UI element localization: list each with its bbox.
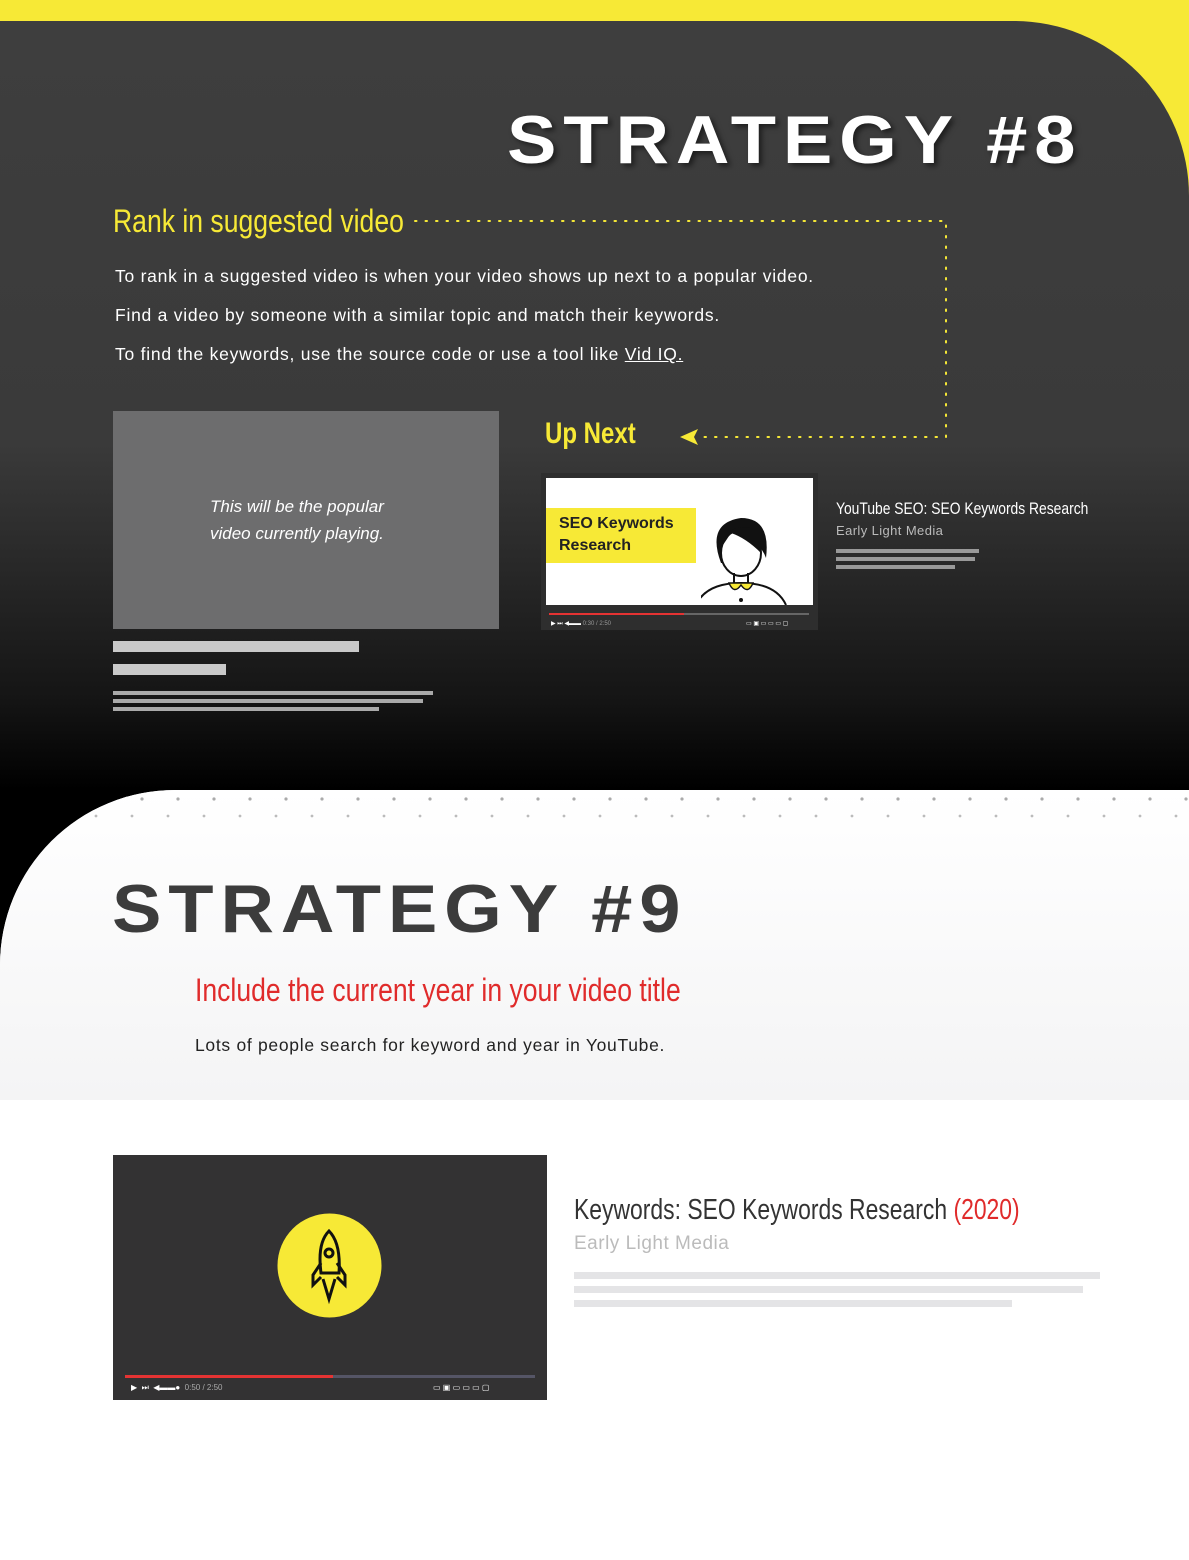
panel: strategy 9 light section	[0, 790, 1189, 1560]
popular video placeholder	[113, 411, 499, 629]
dotted pattern	[94, 797, 1188, 818]
text block: description	[115, 266, 814, 364]
label: SEO keywords research: Research	[559, 537, 631, 554]
placeholder lines under popular video	[113, 641, 433, 711]
label: SEO keywords research: SEO Keywords	[559, 515, 674, 532]
icon: woman illustration	[701, 518, 787, 605]
suggested video info	[836, 499, 1088, 569]
video player mockup: ▭ ▣ ▭ ▭ ▭ ▢	[433, 1383, 489, 1392]
video info: Keywords: SEO Keywords Research (2020)	[574, 1194, 1020, 1226]
label: SEO keywords research	[546, 508, 696, 563]
yellow top band	[0, 0, 1189, 200]
popular video placeholder: video currently playing.	[210, 524, 384, 543]
text: description: Lots of people search for keyword and year in YouTube.	[195, 1035, 665, 1055]
suggested video thumbnail: ▭ ▣ ▭ ▭ ▭ ▢	[746, 621, 788, 627]
suggested video info: YouTube SEO: SEO Keywords Research	[836, 499, 1088, 518]
video info: Early Light Media	[574, 1233, 729, 1254]
heading: up next: Up Next	[545, 417, 636, 450]
text block: description: To rank in a suggested video is when your video shows up next to a popular video.	[115, 266, 814, 286]
progress bar	[125, 1375, 535, 1378]
player progress bar	[549, 613, 809, 615]
title strategy 9: STRATEGY #9	[112, 871, 687, 947]
video info	[574, 1194, 1100, 1307]
text block: description: To find the keywords, use the source code or use a tool like Vid IQ.	[115, 344, 683, 364]
panel: strategy 8 dark section	[0, 21, 1189, 790]
text block: description: Find a video by someone with a similar topic and match their keywords.	[115, 305, 720, 325]
popular video placeholder: This will be the popular	[210, 497, 384, 516]
title strategy 8: STRATEGY #8	[507, 102, 1082, 178]
suggested video info: Early Light Media	[836, 523, 943, 538]
video player mockup: ▶ ⏭ ◀▬▬● 0:50 / 2:50	[131, 1383, 222, 1392]
suggested video thumbnail: ▶ ⏭ ◀▬▬ 0:30 / 2:50	[551, 621, 611, 627]
video player mockup	[113, 1155, 547, 1400]
suggested video thumbnail	[541, 473, 818, 630]
heading: rank in suggested video: Rank in suggested video	[113, 203, 404, 239]
icon: rocket in yellow circle	[278, 1214, 382, 1318]
heading: include the current year: Include the current year in your video title	[195, 972, 681, 1008]
dotted arrow connector	[414, 220, 947, 445]
